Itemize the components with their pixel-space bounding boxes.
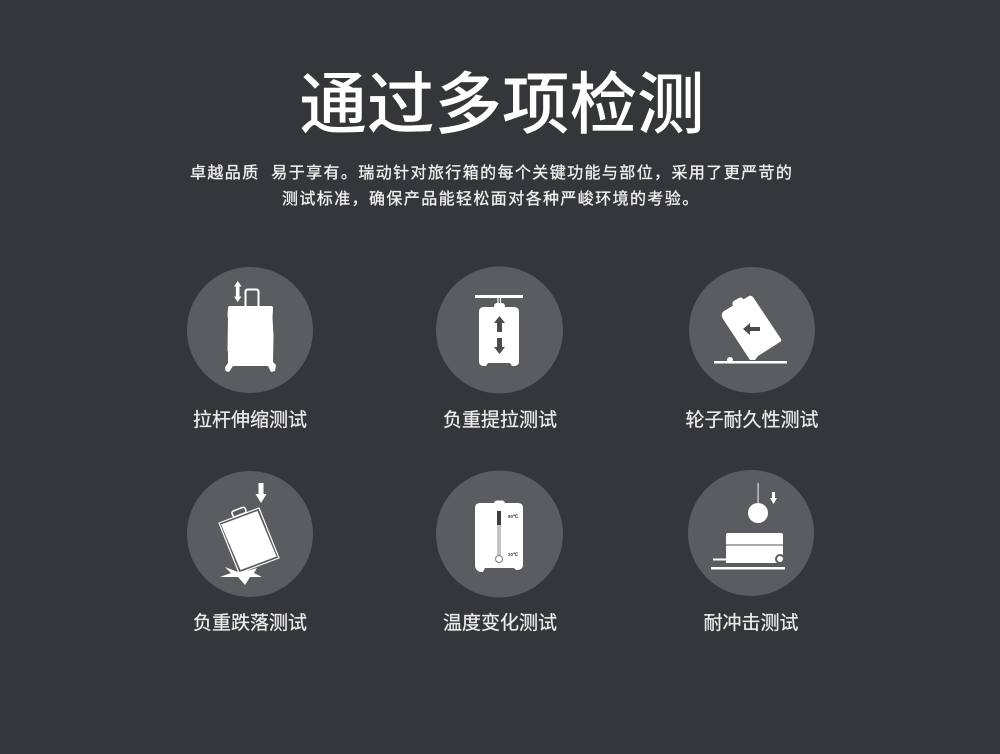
icon: wheel durability test [689, 267, 815, 393]
label: loaded lift test: 负重提拉测试 [443, 410, 557, 431]
icon: temperature change test [436, 470, 563, 598]
icon: temperature change test: 20℃ [508, 551, 519, 557]
intro text block [190, 164, 793, 208]
label: telescopic handle test: 拉杆伸缩测试 [193, 410, 307, 431]
label: temperature change test: 温度变化测试 [443, 613, 557, 634]
label: wheel durability test: 轮子耐久性测试 [685, 410, 818, 431]
intro text block: 卓越品质 易于享有。瑞动针对旅行箱的每个关键功能与部位，采用了更严苛的 [190, 165, 793, 182]
icon: loaded lift test [436, 266, 563, 394]
icon: impact test [688, 470, 814, 596]
icon: temperature change test: 80℃ [508, 513, 519, 519]
icon: telescopic handle test [187, 267, 313, 393]
title: 通过多项检测 [299, 68, 704, 143]
intro text block: 测试标准，确保产品能轻松面对各种严峻环境的考验。 [282, 191, 700, 208]
label: loaded drop test: 负重跌落测试 [193, 613, 307, 634]
label: impact test: 耐冲击测试 [703, 613, 798, 634]
icon: loaded drop test [187, 471, 313, 597]
